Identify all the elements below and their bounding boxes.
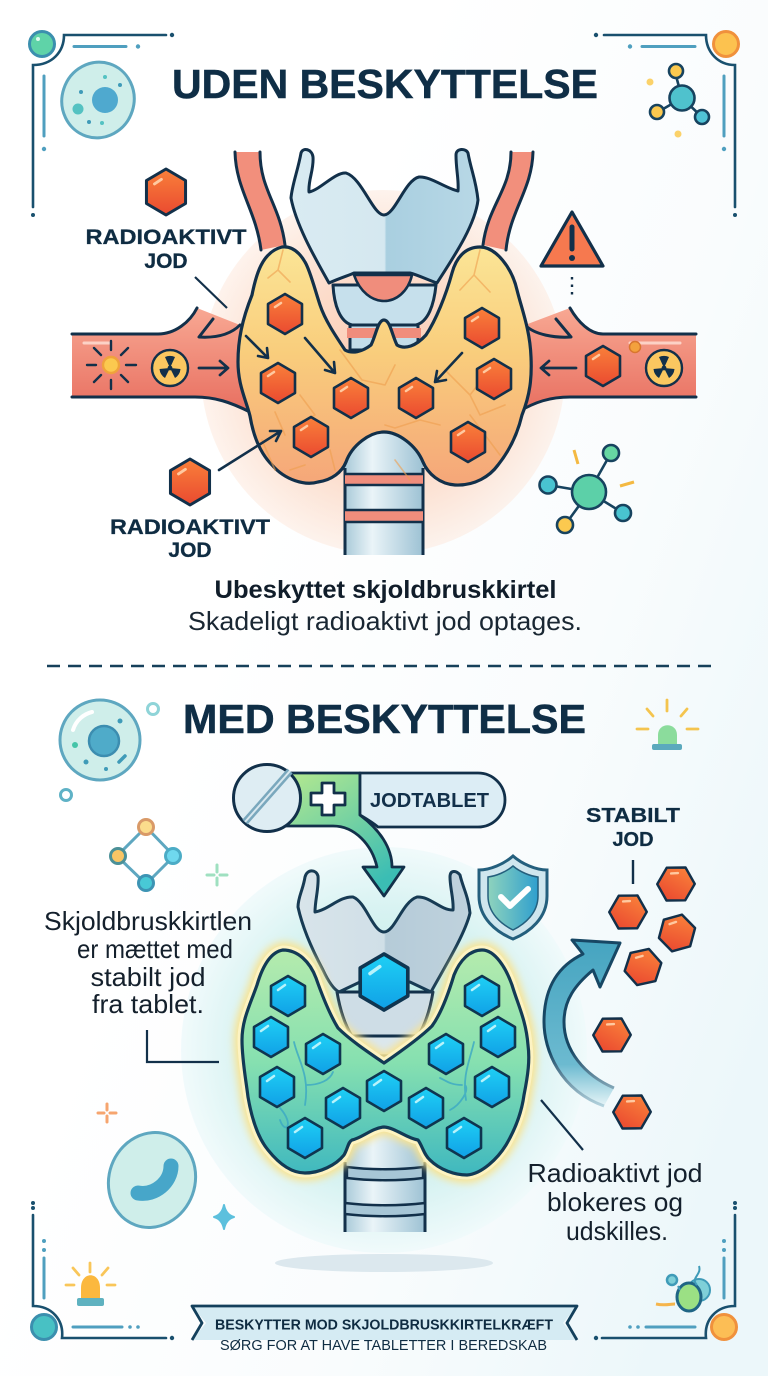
label: jodtablet: JODTABLET xyxy=(370,790,489,812)
lower thyroid xyxy=(242,950,529,1175)
title: med beskyttelse: MED BESKYTTELSE xyxy=(183,696,586,742)
lower thyroid cartilage xyxy=(298,871,470,992)
jodtablet bar with pill and arrow xyxy=(234,764,505,896)
banner subline: SØRG FOR AT HAVE TABLETTER I BEREDSKAB xyxy=(220,1338,547,1354)
white label section xyxy=(360,773,505,827)
label: stabilt jod: JOD xyxy=(612,829,654,851)
upper trachea xyxy=(345,325,423,555)
text: skjoldbruskkirtlen: fra tablet. xyxy=(92,989,204,1019)
icon: shield xyxy=(479,856,547,939)
banner xyxy=(192,1306,577,1354)
lower cricoid xyxy=(337,992,433,1036)
icon: cell lower top-left xyxy=(60,700,158,800)
upper blood vessels xyxy=(72,152,696,412)
plus xyxy=(311,783,345,815)
icon: radiation right xyxy=(646,350,682,386)
arrow: blocked iodine curving up xyxy=(544,940,620,1106)
stable iodine hexagons xyxy=(589,859,699,1137)
text: skjoldbruskkirtlen: Skjoldbruskkirtlen xyxy=(44,906,252,936)
text: skjoldbruskkirtlen: er mættet med xyxy=(77,934,233,964)
sparkle orange xyxy=(98,1104,116,1122)
icon: cell top-left xyxy=(52,53,144,147)
sparkle blue xyxy=(214,1205,234,1229)
icon: network xyxy=(110,820,180,890)
arrows into upper thyroid xyxy=(219,336,462,470)
icon: sun in vessel xyxy=(87,341,136,389)
icon: bacterium cell xyxy=(95,1120,209,1240)
icon: alarm light bottom-left xyxy=(66,1263,115,1306)
hexagons in upper thyroid xyxy=(261,294,511,462)
glow behind upper thyroid xyxy=(201,190,565,554)
dot in vessel xyxy=(630,342,640,352)
frame: bottom-left corner xyxy=(31,1201,174,1340)
green section with arrow xyxy=(285,773,404,896)
leader line xyxy=(195,277,227,308)
large hexagon in larynx xyxy=(360,954,408,1010)
hexagons in lower thyroid xyxy=(254,976,515,1158)
text: skjoldbruskkirtlen: stabilt jod xyxy=(90,962,206,992)
upper cricoid xyxy=(333,285,436,325)
icon: radiation left xyxy=(152,350,188,386)
label: radioaktivt jod bottom: RADIOAKTIVT xyxy=(110,516,270,539)
text: radioaktivt jod blokeres: Radioaktivt jod xyxy=(528,1158,702,1188)
frame: bottom-right corner xyxy=(594,1201,737,1340)
hexagon: bottom-left xyxy=(170,459,210,505)
divider xyxy=(47,665,712,667)
arrow: vessel left xyxy=(199,361,228,375)
leader line right xyxy=(541,1100,583,1150)
icon: alarm light top-right xyxy=(637,700,698,750)
frame: top-left corner xyxy=(30,32,174,217)
label: radioaktivt jod bottom: JOD xyxy=(168,539,212,562)
caption upper: Ubeskyttet skjoldbruskkirtel xyxy=(214,576,556,604)
label: radioaktivt jod top: RADIOAKTIVT xyxy=(86,226,247,249)
hexagon in right vessel xyxy=(586,346,620,386)
title: uden beskyttelse: UDEN BESKYTTELSE xyxy=(172,61,598,107)
frame: top-right corner xyxy=(594,32,738,217)
icon: molecule top-right xyxy=(646,64,709,138)
icon: microbe bottom-right xyxy=(656,1266,710,1311)
lower trachea xyxy=(345,1032,425,1232)
label: radioaktivt jod top: JOD xyxy=(144,250,188,273)
text: radioaktivt jod blokeres: udskilles. xyxy=(566,1216,668,1246)
upper thyroid cartilage xyxy=(291,149,478,283)
icon: warning triangle xyxy=(541,212,603,295)
text: radioaktivt jod blokeres: blokeres og xyxy=(547,1187,683,1217)
glow behind lower thyroid xyxy=(181,847,587,1253)
arrow: vessel right xyxy=(541,361,576,375)
sparkle green xyxy=(207,865,227,885)
leader line left xyxy=(147,1030,219,1062)
hexagon: top-left xyxy=(146,169,186,215)
label: stabilt jod: STABILT xyxy=(586,805,680,827)
upper thyroid xyxy=(238,247,531,485)
shadow under lower thyroid xyxy=(275,1254,493,1272)
red oval in larynx xyxy=(354,275,412,301)
caption upper: Skadeligt radioaktivt jod optages. xyxy=(188,606,582,636)
icon: molecule lower right of upper section xyxy=(540,445,634,533)
leader line to stable iodine xyxy=(632,860,634,884)
banner headline: BESKYTTER MOD SKJOLDBRUSKKIRTELKRÆFT xyxy=(215,1318,553,1334)
pill xyxy=(234,764,300,832)
